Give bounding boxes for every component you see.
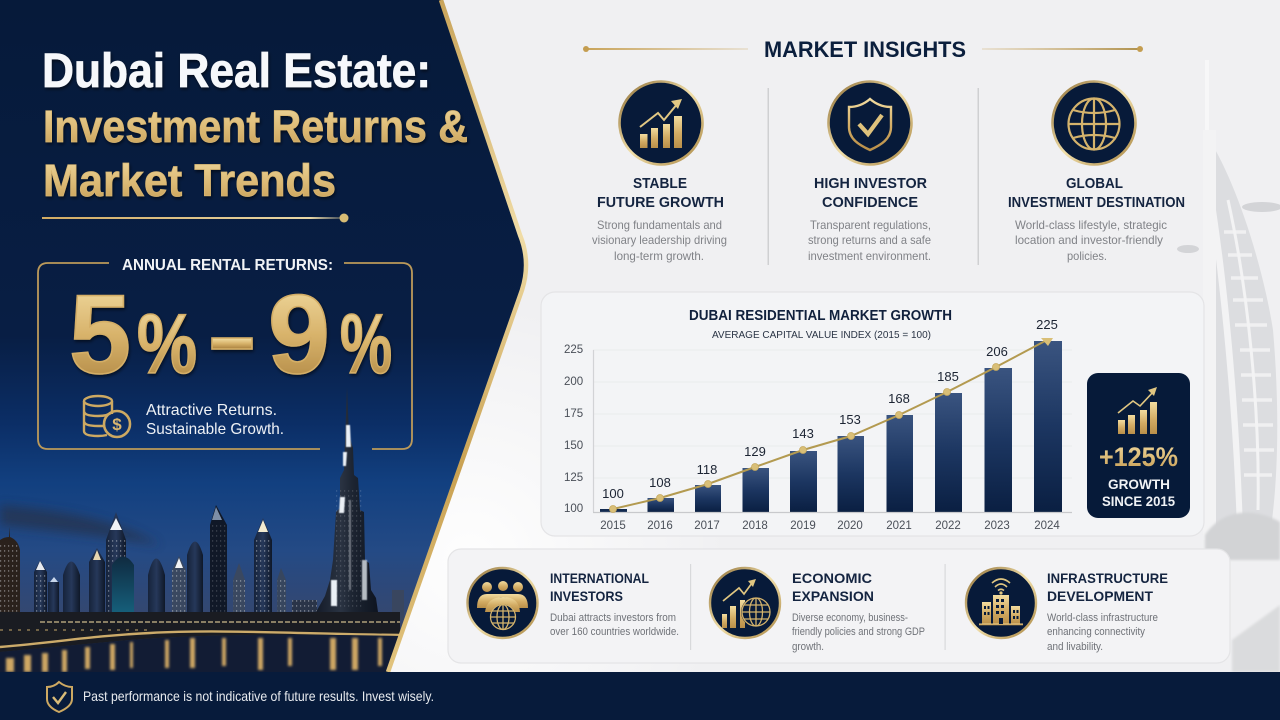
divider [978,88,979,265]
callout caption: Sustainable Growth. [146,421,284,438]
icon: coins [84,396,130,437]
panel: insight 2 high investor confidence [808,82,931,263]
value labels: 153 [839,412,861,427]
description [808,218,931,263]
x axis years: 2023 [984,520,1010,532]
driver: international investors: INTERNATIONAL [550,570,649,586]
chart title: DUBAI RESIDENTIAL MARKET GROWTH [689,308,952,324]
heading: FUTURE GROWTH [597,194,724,211]
icon: people and globe [468,568,538,638]
big figure 5% – 9%: % [137,297,197,391]
callout label: ANNUAL RENTAL RETURNS: [122,257,333,274]
title [42,45,468,206]
panel: residential market growth chart [541,292,1204,536]
driver: infrastructure development: enhancing connectivity [1047,626,1145,638]
driver: infrastructure development: INFRASTRUCTURE [1047,570,1168,586]
heading [814,175,927,211]
driver: economic expansion: friendly policies and strong GDP [792,626,925,638]
callout: +125% growth: +125% [1099,442,1178,472]
x axis years [600,520,1060,532]
driver: infrastructure development: World-class infrastructure [1047,612,1158,624]
callout: +125% growth: GROWTH [1108,476,1170,492]
y axis: 175 [564,408,583,420]
y axis: 125 [564,472,583,484]
big figure 5% – 9%: 9 [268,272,330,397]
heading: STABLE [633,175,687,192]
driver: infrastructure development: DEVELOPMENT [1047,588,1153,604]
x axis years: 2016 [647,520,673,532]
y axis: 150 [564,440,583,452]
big figure 5% – 9%: 5 [69,272,131,397]
disclaimer: Past performance is not indicative of future results. Invest wisely. [83,688,434,704]
x axis years: 2021 [886,520,912,532]
panel: insight 3 global investment destination [1008,82,1185,263]
value labels: 100 [602,486,624,501]
bar chart [600,341,1062,512]
value labels: 168 [888,391,910,406]
driver: economic expansion: Diverse economy, business- [792,612,908,624]
heading: market insights: MARKET INSIGHTS [764,37,966,62]
description: long-term growth. [614,249,704,263]
x axis years: 2019 [790,520,816,532]
value labels [602,317,1058,501]
value labels: 118 [697,462,717,477]
callout: +125% growth [1087,373,1190,518]
x axis years: 2018 [742,520,768,532]
icon: growth chart [620,82,702,164]
driver: international investors: Dubai attracts investors from [550,612,676,624]
driver: international investors: over 160 countries worldwide. [550,626,679,638]
skyline: waterfront promenade and lights [0,612,400,652]
icon: coins: $ [112,415,122,434]
x axis years: 2022 [935,520,961,532]
callout: annual rental returns [38,257,412,449]
value labels: 108 [649,475,671,490]
description: policies. [1067,249,1107,263]
driver: economic expansion: EXPANSION [792,588,874,604]
skyline: Burj Khalifa [316,387,378,612]
panel: insight 1 stable future growth [592,82,727,263]
title: Investment Returns & [43,101,468,152]
icon: footer shield [47,682,72,712]
icon: globe [1052,82,1136,164]
value labels: 129 [744,444,766,459]
y axis: 100 [564,503,583,515]
driver: economic expansion: growth. [792,641,824,653]
driver: economic expansion: ECONOMIC [792,570,872,586]
title: Dubai Real Estate: [42,45,431,98]
heading: GLOBAL [1066,175,1123,192]
description: visionary leadership driving [592,233,727,247]
description: Transparent regulations, [810,218,931,232]
heading: HIGH INVESTOR [814,175,927,192]
clouds [0,505,160,545]
driver: international investors: INVESTORS [550,588,623,604]
description: investment environment. [808,249,931,263]
y axis: 225 [564,344,583,356]
icon: chart and globe [710,568,780,638]
panel: left navy banner with skyline [0,0,540,672]
chart subtitle: AVERAGE CAPITAL VALUE INDEX (2015 = 100) [712,329,931,341]
heading: INVESTMENT DESTINATION [1008,194,1185,211]
skyline: distant city towers [0,505,404,620]
heading [597,175,724,211]
title: Market Trends [43,155,336,206]
value labels: 206 [986,344,1008,359]
footer bar [0,672,1280,720]
divider [768,88,769,265]
background image: ghosted Burj Al Arab [1177,60,1280,672]
x axis years: 2015 [600,520,626,532]
driver: international investors [468,568,679,638]
gold edge of banner [388,0,526,672]
description [1015,218,1167,263]
callout caption [146,402,284,438]
description: location and investor-friendly [1015,233,1163,247]
panel: bottom drivers [448,549,1230,663]
description: Strong fundamentals and [597,218,722,232]
y axis: 200 [564,376,583,388]
driver: infrastructure development: and livability. [1047,641,1103,653]
heading: market insights [583,37,1143,62]
x axis years: 2017 [694,520,720,532]
driver: infrastructure development [966,568,1168,653]
icon: wifi building [966,568,1036,638]
x axis years: 2024 [1034,520,1060,532]
icon: shield [828,82,912,164]
value labels: 225 [1036,317,1058,332]
description: World-class lifestyle, strategic [1015,218,1167,232]
trend line with markers [610,338,1053,512]
value labels: 143 [792,426,814,441]
big figure 5% – 9% [69,272,392,397]
driver: economic expansion [710,568,925,653]
description: strong returns and a safe [808,233,931,247]
callout caption: Attractive Returns. [146,402,277,419]
big figure 5% – 9%: % [340,297,392,391]
heading [1008,175,1185,211]
title divider with dot [42,214,348,222]
x axis years: 2020 [837,520,863,532]
value labels: 185 [937,369,959,384]
y axis [564,344,1072,515]
callout: +125% growth: SINCE 2015 [1102,493,1175,509]
icon: growth bars [1118,387,1157,434]
skyline: water with reflections [0,635,400,672]
heading: CONFIDENCE [822,194,918,211]
description [592,218,727,263]
